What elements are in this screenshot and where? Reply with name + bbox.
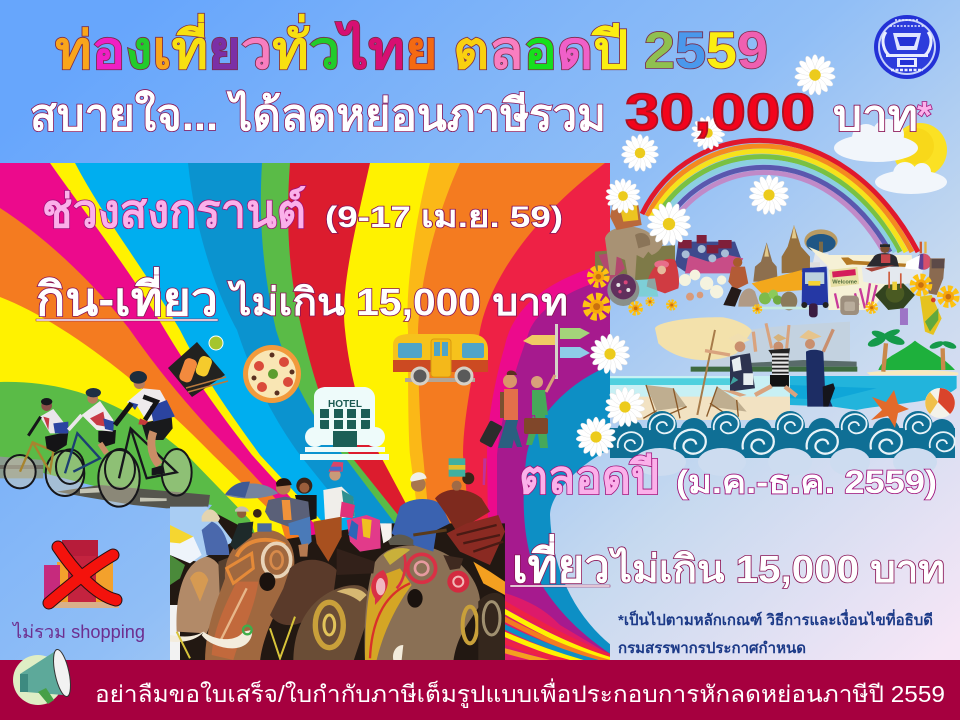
basket of flowers — [607, 274, 639, 306]
beach umbrella — [655, 317, 752, 415]
title: ท่องเที่ยวทั่วไทย ตลอดปี 2559 — [55, 14, 768, 80]
collage: beach scene — [610, 317, 958, 420]
subtitle: tax deduction 30,000 baht: บาท — [833, 92, 918, 139]
costumed figure and ribbons — [920, 258, 945, 335]
text: footnote conditions: กรมสรรพากรประกาศกำหนด — [618, 640, 806, 657]
text: footnote conditions — [618, 609, 933, 657]
subtitle: tax deduction 30,000 baht: 30,000 — [625, 84, 815, 142]
icon: pizza — [243, 345, 301, 403]
tropical island — [866, 328, 958, 375]
icon: starfish — [871, 390, 909, 428]
icon: hotel building: HOTEL — [328, 399, 362, 410]
main elephant — [170, 530, 337, 662]
footer text: receipt reminder: อย่าลืมขอใบเสร็จ/ใบกำกับภาษีเต็มรูปแบบเพื่อประกอบการหักลดหย่อนภาษีปี 2559 — [95, 678, 945, 708]
left elephant — [176, 552, 243, 633]
heading: eat and travel limit: ไม่เกิน 15,000 บาท — [227, 280, 568, 324]
heading: eat and travel limit: กิน-เที่ยว — [36, 267, 218, 325]
man crouching — [723, 258, 760, 307]
heading: songkran period: ช่วงสงกรานต์ — [42, 185, 306, 237]
lounge chairs — [643, 385, 747, 418]
subtitle: tax deduction 30,000 baht — [30, 84, 932, 142]
heading: songkran period — [42, 185, 563, 237]
heading: travel limit: เที่ยว — [512, 534, 610, 592]
logo: revenue department seal — [874, 15, 940, 79]
heading: whole year period: (ม.ค.-ธ.ค. 2559) — [676, 464, 937, 500]
decorative thai waves band — [610, 411, 955, 476]
icon: yellow bus — [393, 334, 488, 384]
welcome sign: Welcome — [832, 280, 857, 286]
golden umbrella — [804, 229, 838, 268]
icon: beach ball — [925, 388, 955, 418]
icon: hotel building — [300, 387, 389, 460]
photo collage: rainbow arc — [642, 140, 918, 252]
photo strip behind women — [691, 322, 857, 372]
coconuts — [752, 290, 812, 310]
tuk-tuk — [801, 262, 829, 317]
krathong — [875, 272, 915, 325]
collage: thai tourism cutouts — [588, 197, 956, 335]
heading: whole year period: ตลอดปี — [519, 451, 659, 503]
heading: whole year period — [519, 451, 937, 503]
footer bar — [0, 660, 960, 720]
orchids and backpack — [835, 283, 877, 315]
icon: sun and clouds — [834, 119, 947, 194]
welcome sign — [829, 267, 859, 287]
sunflowers — [588, 269, 956, 316]
photo: songkran elephants and riders — [170, 458, 505, 662]
subtitle: tax deduction 30,000 baht: * — [917, 95, 932, 137]
subtitle: tax deduction 30,000 baht: สบายใจ... ได้ลดหย่อนภาษีรวม — [30, 89, 606, 140]
icon: travellers with luggage — [479, 370, 555, 448]
jumping women — [705, 323, 835, 407]
text: not including shopping: ไม่รวม shopping — [11, 621, 145, 642]
icon: sushi plate — [168, 336, 228, 397]
heading: eat and travel limit — [36, 267, 568, 325]
kayaker — [841, 244, 920, 272]
lady in pink headdress — [647, 259, 679, 293]
riders — [202, 458, 505, 595]
icon: signpost — [523, 324, 590, 379]
icon: no shopping bags — [44, 540, 119, 608]
icon: bicycle riders — [0, 371, 210, 508]
middle elephant body — [293, 585, 371, 662]
elephant with riders — [605, 197, 664, 280]
ribbon vase — [905, 242, 931, 270]
icon: megaphone — [13, 648, 74, 705]
riders — [28, 371, 175, 476]
white flowers — [679, 270, 726, 298]
cream backdrop and boat — [808, 247, 923, 310]
heading: travel limit: ไม่เกิน 15,000 บาท — [608, 547, 945, 591]
flowers: daisies — [576, 54, 836, 457]
text: footnote conditions: *เป็นไปตามหลักเกณฑ์ วิธีการและเงื่อนไขที่อธิบดี — [618, 609, 933, 629]
heading: songkran period: (9-17 เม.ย. 59) — [325, 201, 563, 234]
chedi stupas — [753, 225, 810, 282]
dancers — [675, 235, 743, 273]
panel: rainbow swirl background — [0, 150, 620, 676]
right elephant — [365, 545, 505, 662]
heading: travel limit — [510, 534, 945, 592]
